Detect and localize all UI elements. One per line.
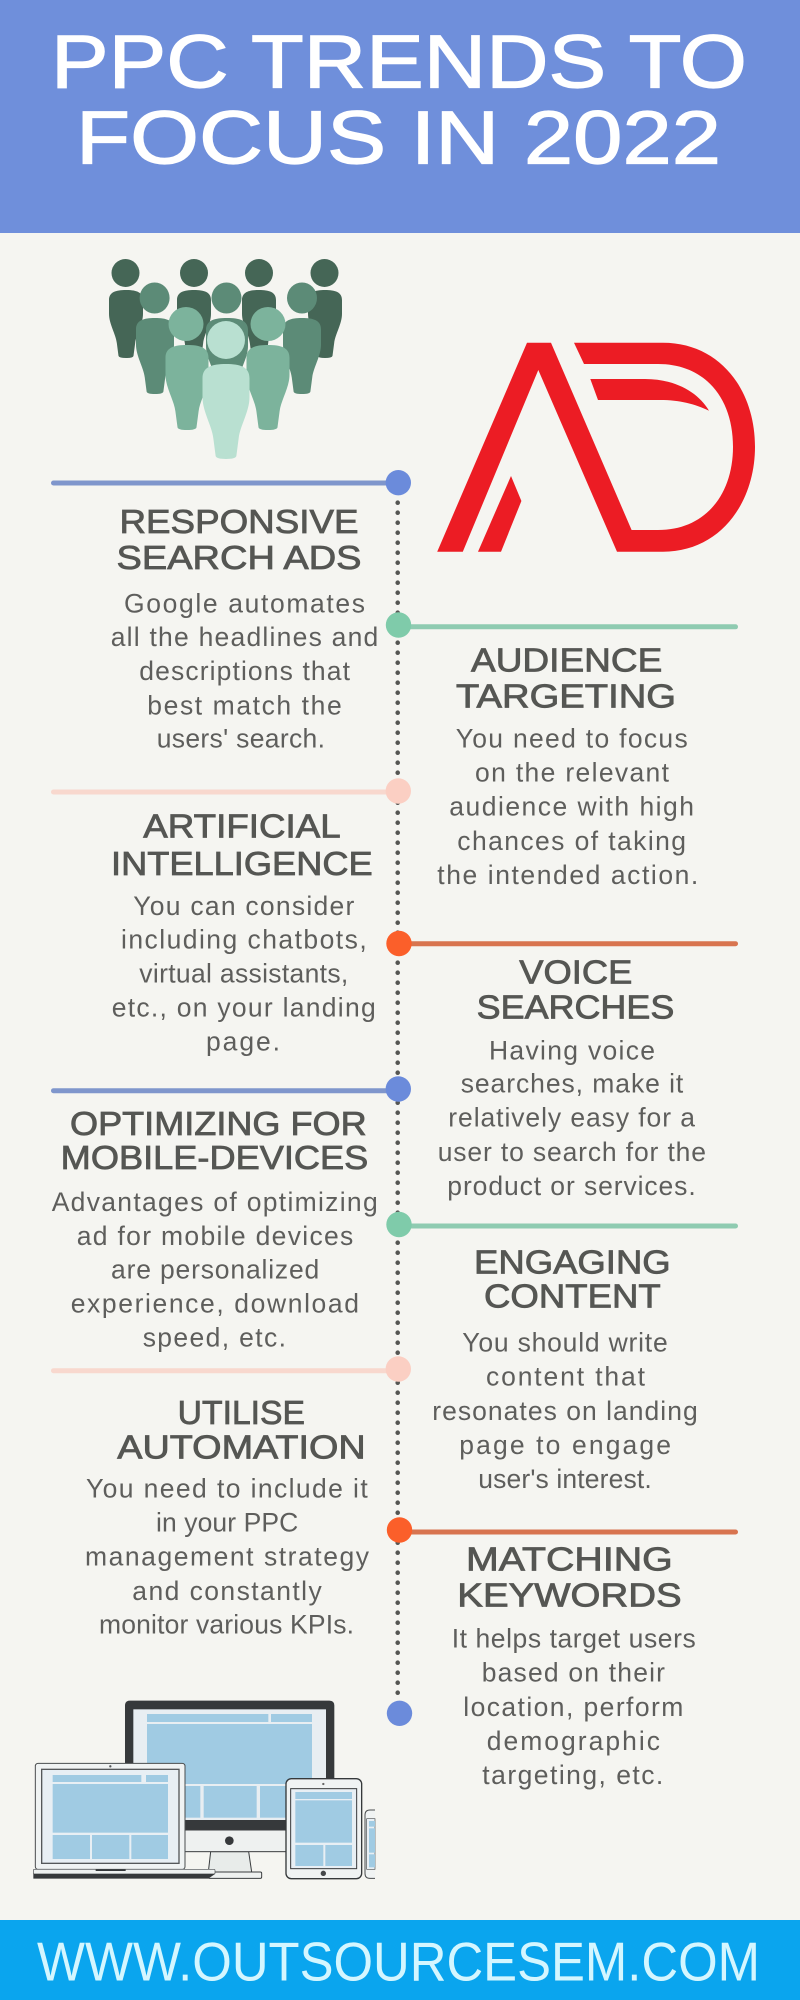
text: mobile devices description: ad for mobile devices (77, 1221, 353, 1251)
panel: utilise automation (51, 1356, 411, 1639)
text: mobile devices description: Advantages of optimizing (52, 1187, 378, 1217)
header banner (0, 0, 800, 233)
text: responsive search ads description: all the headlines and (111, 622, 378, 652)
text: audience targeting description: audience with high (449, 792, 694, 822)
text: engaging content description: You should write (462, 1328, 668, 1358)
panel: matching keywords (387, 1517, 738, 1790)
text: mobile devices description: are personalized (111, 1254, 319, 1284)
text: engaging content description: page to engage (459, 1430, 671, 1460)
text: matching keywords description: based on their (482, 1658, 665, 1688)
heading: audience targeting (456, 642, 676, 716)
panel: responsive search ads (51, 470, 411, 754)
panel: artificial intelligence (51, 778, 411, 1057)
title: FOCUS IN 2022 (76, 96, 721, 180)
text: matching keywords description: targeting, etc. (482, 1760, 663, 1790)
text: artificial intelligence description (112, 891, 376, 1057)
text: voice searches description: searches, make it (461, 1069, 684, 1099)
text: responsive search ads description: users' search. (157, 724, 325, 754)
footer banner (0, 1920, 800, 2000)
text: responsive search ads description: best match the (147, 690, 342, 720)
heading: voice searches (477, 954, 674, 1026)
text: artificial intelligence description: virtual assistants, (139, 959, 348, 989)
heading: engaging content: ENGAGING (474, 1244, 671, 1281)
heading: artificial intelligence: INTELLIGENCE (111, 846, 373, 883)
text: mobile devices description (52, 1187, 378, 1353)
text: audience targeting description: You need to focus (456, 724, 688, 754)
heading: matching keywords: KEYWORDS (457, 1578, 682, 1615)
text: mobile devices description: speed, etc. (143, 1323, 286, 1353)
text: mobile devices description: experience, download (71, 1288, 359, 1318)
heading: responsive search ads: RESPONSIVE (120, 504, 358, 541)
text: utilise automation description (85, 1474, 370, 1639)
text: engaging content description: resonates on landing (432, 1396, 698, 1426)
icon: desktop monitor (125, 1701, 334, 1878)
connector: pink marker (51, 778, 411, 804)
text: utilise automation description: management strategy (85, 1542, 370, 1572)
text: matching keywords description: It helps target users (452, 1624, 696, 1654)
text: utilise automation description: and constantly (132, 1576, 322, 1606)
heading: optimizing for mobile devices: OPTIMIZING FOR (70, 1106, 367, 1143)
heading: artificial intelligence (111, 809, 373, 883)
heading: voice searches: SEARCHES (477, 989, 674, 1026)
heading: artificial intelligence: ARTIFICIAL (143, 809, 341, 846)
heading: voice searches: VOICE (519, 954, 632, 991)
text: voice searches description (438, 1035, 706, 1201)
text: voice searches description: relatively easy for a (448, 1103, 695, 1133)
heading: audience targeting: TARGETING (456, 679, 676, 716)
text: audience targeting description (437, 724, 698, 890)
heading: matching keywords (457, 1542, 682, 1615)
text: voice searches description: Having voice (489, 1035, 655, 1065)
text: utilise automation description: You need to include it (86, 1474, 368, 1504)
heading: engaging content: CONTENT (484, 1279, 661, 1316)
text: matching keywords description: demographic (487, 1726, 660, 1756)
panel: audience targeting (386, 612, 738, 890)
icon: phone (365, 1810, 375, 1878)
title: PPC TRENDS TO (51, 20, 747, 104)
connector: pink marker (51, 1356, 411, 1382)
panel: optimizing for mobile devices (51, 1076, 411, 1353)
heading: responsive search ads (116, 504, 362, 577)
panel: engaging content (386, 1212, 738, 1494)
text: audience targeting description: chances of taking (457, 826, 686, 856)
panel: voice searches (386, 931, 738, 1201)
heading: engaging content (474, 1244, 671, 1316)
connector: orange marker (386, 931, 738, 956)
connector: green marker (386, 612, 738, 638)
heading: optimizing for mobile devices (61, 1106, 368, 1177)
timeline end marker (387, 1701, 412, 1726)
text: artificial intelligence description: including chatbots, (121, 924, 367, 954)
icon: tablet (286, 1779, 362, 1879)
icon: red AD logo (437, 343, 755, 552)
text: responsive search ads description: Google automates (124, 589, 365, 619)
heading: matching keywords: MATCHING (466, 1542, 673, 1579)
heading: utilise automation (117, 1395, 366, 1466)
text: engaging content description: user's interest. (478, 1464, 652, 1494)
icon: responsive devices (33, 1701, 375, 1879)
text: responsive search ads description (111, 589, 378, 754)
text: audience targeting description: the intended action. (437, 860, 698, 890)
connector: orange marker (387, 1517, 738, 1543)
heading: utilise automation: UTILISE (178, 1395, 305, 1432)
text: voice searches description: product or services. (447, 1171, 696, 1201)
heading: optimizing for mobile devices: MOBILE-DEVICES (61, 1140, 368, 1177)
heading: utilise automation: AUTOMATION (117, 1429, 366, 1466)
icon: laptop (33, 1763, 215, 1879)
text: artificial intelligence description: etc., on your landing (112, 993, 376, 1023)
connector: blue marker (51, 470, 411, 495)
footer website url: WWW.OUTSOURCESEM.COM (37, 1931, 760, 1993)
text: engaging content description: content that (486, 1362, 646, 1392)
text: engaging content description (432, 1328, 698, 1494)
text: responsive search ads description: descriptions that (139, 656, 351, 686)
text: matching keywords description: location, perform (463, 1692, 683, 1722)
text: voice searches description: user to search for the (438, 1137, 706, 1167)
timeline: dotted spine (395, 503, 400, 1693)
text: audience targeting description: on the relevant (475, 758, 670, 788)
connector: blue marker (51, 1076, 411, 1102)
text: artificial intelligence description: You can consider (133, 891, 354, 921)
icon: group of people (109, 259, 342, 459)
text: matching keywords description (452, 1624, 696, 1790)
heading: responsive search ads: SEARCH ADS (116, 540, 362, 577)
title (51, 20, 747, 180)
text: utilise automation description: monitor various KPIs. (99, 1609, 354, 1639)
connector: green marker (386, 1212, 738, 1237)
heading: audience targeting: AUDIENCE (471, 642, 662, 679)
text: utilise automation description: in your PPC (156, 1508, 298, 1538)
text: artificial intelligence description: page. (206, 1027, 280, 1057)
